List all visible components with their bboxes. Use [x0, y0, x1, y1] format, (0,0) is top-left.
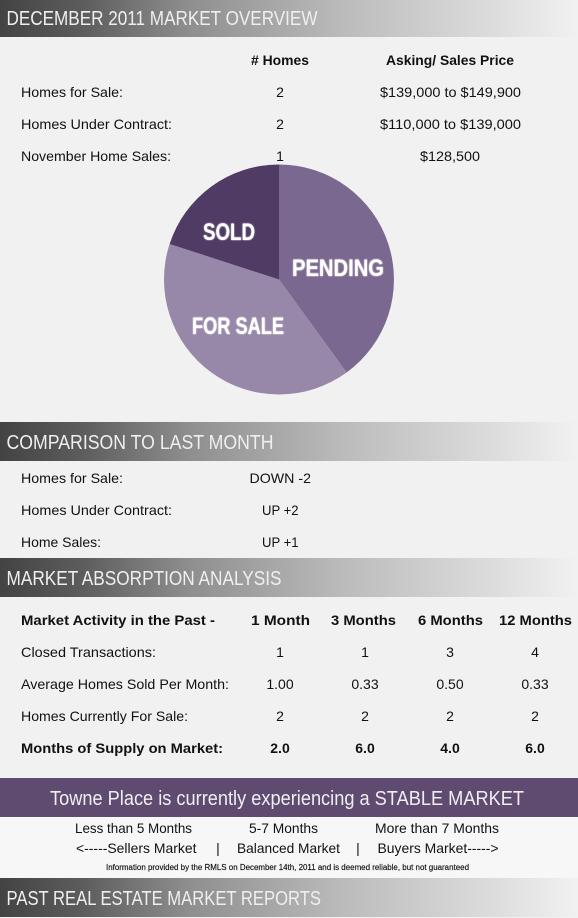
market overview table: 2 [276, 116, 284, 132]
market scale legend: | [216, 840, 220, 856]
market scale legend: <-----Sellers Market [76, 840, 197, 856]
comparison table: Homes Under Contract: [21, 502, 172, 518]
absorption table: 2 [276, 708, 284, 724]
absorption table: 2 [446, 708, 454, 724]
market scale legend: 5-7 Months [249, 820, 318, 836]
absorption table: 2 [531, 708, 539, 724]
absorption table: 0.33 [521, 676, 549, 692]
absorption table: 1.00 [266, 676, 294, 692]
market overview table: November Home Sales: [21, 148, 171, 164]
absorption table: 3 [446, 644, 454, 660]
absorption table: 12 Months [499, 612, 572, 628]
section header: comparison to last month [0, 422, 578, 461]
comparison table [21, 470, 311, 550]
banner: stable market [0, 778, 578, 817]
disclaimer: Information provided by the RMLS on December 14th, 2011 and is deemed reliable, but not guaranteed [106, 863, 469, 872]
slice: sold [170, 164, 279, 280]
absorption table: 6 Months [418, 612, 483, 628]
section header: comparison to last month: COMPARISON TO LAST MONTH [6, 432, 274, 454]
absorption table [21, 612, 572, 756]
label: for sale: FOR SALE [192, 313, 284, 340]
comparison table: UP +1 [262, 534, 299, 550]
market overview table: $110,000 to $139,000 [380, 116, 521, 132]
market overview table: 1 [276, 148, 284, 164]
absorption table: Months of Supply on Market: [21, 740, 223, 756]
market overview table: Homes for Sale: [21, 84, 123, 100]
market overview table: # Homes [251, 52, 309, 68]
absorption table: 2.0 [270, 740, 290, 756]
absorption table: 1 [361, 644, 369, 660]
comparison table: DOWN -2 [250, 470, 311, 486]
comparison table: UP +2 [262, 502, 299, 518]
absorption table: 1 Month [251, 612, 310, 628]
market scale legend [0, 817, 578, 878]
absorption table: 1 [276, 644, 284, 660]
absorption table: 6.0 [525, 740, 545, 756]
market overview table: 2 [276, 84, 284, 100]
label: sold: SOLD [203, 219, 255, 246]
market scale legend: Buyers Market-----> [378, 840, 498, 856]
absorption table: Homes Currently For Sale: [21, 708, 188, 724]
market overview table: Asking/ Sales Price [386, 52, 514, 68]
comparison table: Homes for Sale: [21, 470, 123, 486]
market overview table: Homes Under Contract: [21, 116, 172, 132]
section header: December 2011 market overview: DECEMBER 2011 MARKET OVERVIEW [6, 8, 318, 30]
market scale legend: | [356, 840, 360, 856]
absorption table: Average Homes Sold Per Month: [21, 676, 229, 692]
absorption table: 2 [361, 708, 369, 724]
label: pending: PENDING [292, 255, 384, 282]
absorption table: Closed Transactions: [21, 644, 156, 660]
pie chart: pending, for sale, sold [164, 164, 394, 394]
absorption table: 6.0 [355, 740, 375, 756]
absorption table: 4 [531, 644, 539, 660]
absorption table: Market Activity in the Past - [21, 612, 215, 628]
market scale legend: More than 7 Months [375, 820, 499, 836]
section header: December 2011 market overview [0, 0, 578, 37]
market scale legend: Less than 5 Months [75, 820, 192, 836]
absorption table: 0.33 [351, 676, 379, 692]
section header: market absorption analysis: MARKET ABSORPTION ANALYSIS [6, 568, 282, 590]
absorption table: 3 Months [331, 612, 396, 628]
banner: stable market: Towne Place is currently experiencing a STABLE MARKET [50, 788, 524, 810]
market overview table [21, 52, 521, 164]
section header: past real estate market reports [0, 878, 578, 917]
slice: for sale [164, 244, 347, 394]
market overview table: $139,000 to $149,900 [380, 84, 521, 100]
absorption table: 4.0 [440, 740, 460, 756]
comparison table: Home Sales: [21, 534, 101, 550]
section header: market absorption analysis [0, 558, 578, 597]
absorption table: 0.50 [436, 676, 464, 692]
section header: past real estate market reports: PAST REAL ESTATE MARKET REPORTS [6, 888, 321, 910]
market scale legend: Balanced Market [237, 840, 340, 856]
slice: pending [279, 164, 394, 372]
market overview table: $128,500 [420, 148, 480, 164]
